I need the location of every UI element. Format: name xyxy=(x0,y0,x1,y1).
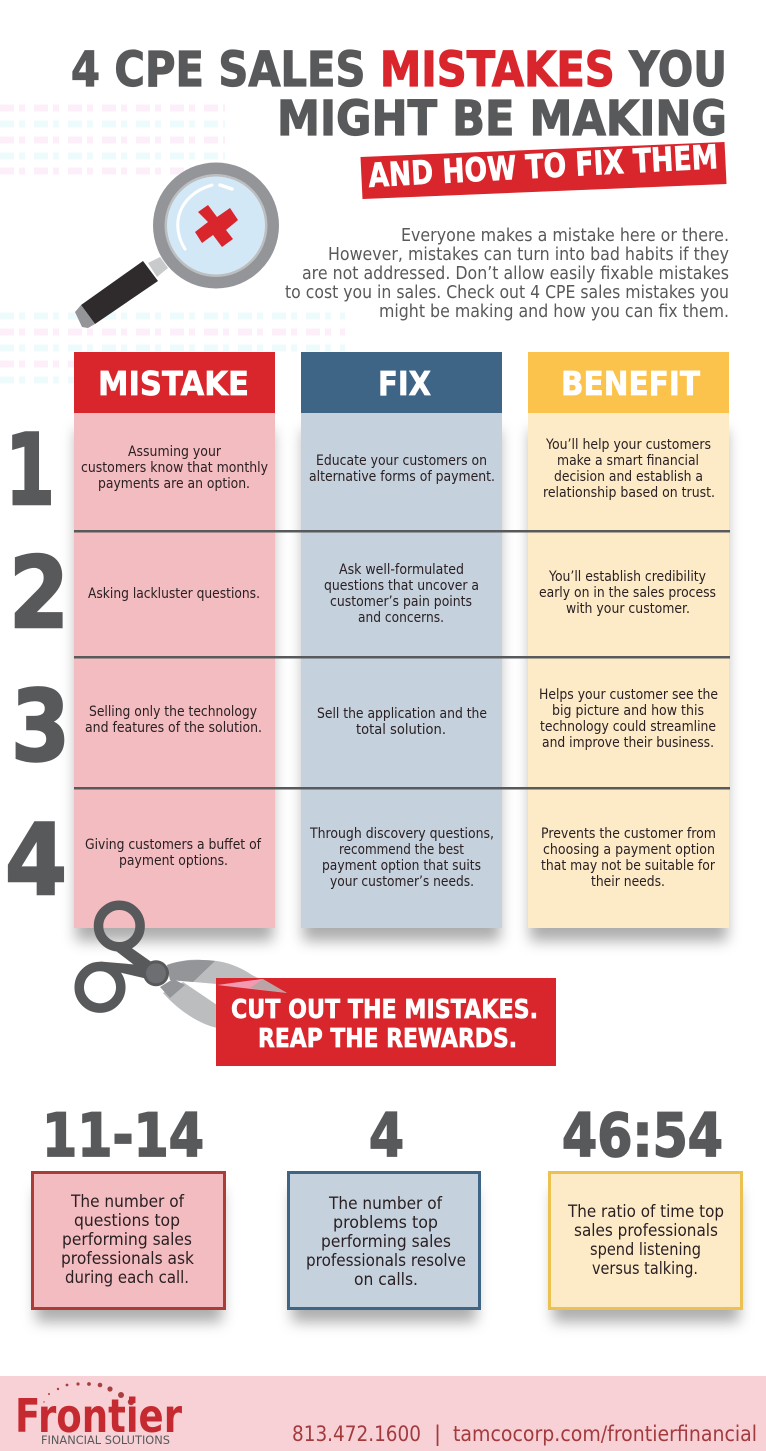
stat: 46:54: 46:54 xyxy=(562,1101,723,1171)
panel: mistake column xyxy=(74,352,275,928)
stat box 2: performing sales xyxy=(321,1232,451,1252)
fix 4: payment option that suits xyxy=(322,858,481,874)
stat box 2: professionals resolve xyxy=(306,1251,466,1271)
stat: 4 xyxy=(288,1101,480,1308)
stat box 2: problems top xyxy=(333,1213,438,1233)
stat box 3: sales professionals xyxy=(574,1221,718,1241)
fix 3 xyxy=(317,706,487,738)
benefit 2: with your customer. xyxy=(566,601,690,617)
stat box 1: during each call. xyxy=(65,1268,189,1288)
stat box 3: spend listening xyxy=(590,1240,701,1260)
fix 1 xyxy=(309,453,495,485)
fix 4: Through discovery questions, xyxy=(309,826,494,842)
icon: scissors xyxy=(79,905,287,1028)
fix 4 xyxy=(309,826,494,890)
title: 4 CPE SALES MISTAKES YOU xyxy=(71,42,727,98)
stat: 46:54 xyxy=(550,1101,742,1308)
benefit 2: You’ll establish credibility xyxy=(548,569,706,585)
benefit header xyxy=(528,352,729,413)
benefit 4 xyxy=(541,826,716,890)
logo: Frontier: FINANCIAL SOLUTIONS xyxy=(41,1433,170,1447)
stat box 3 xyxy=(550,1172,742,1308)
number 4: 4 xyxy=(5,804,67,918)
mistake 1: customers know that monthly xyxy=(81,460,268,476)
logo: Frontier: Frontier xyxy=(15,1389,182,1443)
benefit 4: that may not be suitable for xyxy=(541,858,715,874)
fix 1: Educate your customers on xyxy=(316,453,487,469)
stat box 3: The ratio of time top xyxy=(567,1202,724,1222)
intro text xyxy=(285,226,729,322)
fix 2: Ask well-formulated xyxy=(339,562,464,578)
stat box 2 xyxy=(288,1172,480,1308)
benefit 3: technology could streamline xyxy=(540,719,716,735)
mistake 4: Giving customers a buffet of xyxy=(85,837,262,853)
benefit 1: make a smart financial xyxy=(557,453,699,469)
contact line: | xyxy=(434,1422,441,1447)
benefit 1: decision and establish a xyxy=(554,469,703,485)
stat: 4: 4 xyxy=(369,1101,404,1171)
mistake header xyxy=(74,352,275,413)
stat box 2: The number of xyxy=(328,1194,443,1214)
benefit 1: You’ll help your customers xyxy=(545,437,711,453)
benefit 4: choosing a payment option xyxy=(543,842,715,858)
callout: CUT OUT THE MISTAKES. xyxy=(231,995,538,1025)
benefit 1: relationship based on trust. xyxy=(543,485,715,501)
contact line: 813.472.1600 xyxy=(292,1422,421,1446)
fix 2: customer’s pain points xyxy=(330,594,472,610)
mistake 1: Assuming your xyxy=(128,444,221,460)
stat: 11-14 xyxy=(32,1101,224,1308)
title xyxy=(71,42,727,147)
footer xyxy=(0,1376,766,1451)
callout: REAP THE REWARDS. xyxy=(258,1024,517,1054)
mistake 2: Asking lackluster questions. xyxy=(88,586,260,602)
fix 4: recommend the best xyxy=(339,842,464,858)
stat box 1: The number of xyxy=(70,1192,185,1212)
fix 4: your customer’s needs. xyxy=(330,874,474,890)
stat box 1: professionals ask xyxy=(61,1249,194,1269)
benefit 3: Helps your customer see the xyxy=(539,687,718,703)
mistake 4: payment options. xyxy=(119,853,228,869)
fix 2: questions that uncover a xyxy=(324,578,479,594)
mistake 1: payments are an option. xyxy=(98,476,250,492)
contact line xyxy=(292,1422,757,1447)
benefit 4: Prevents the customer from xyxy=(541,826,716,842)
fix 2: and concerns. xyxy=(358,610,444,626)
title: MIGHT BE MAKING xyxy=(277,91,727,147)
intro text: might be making and how you can fix them. xyxy=(379,302,729,322)
benefit 3: and improve their business. xyxy=(542,735,714,751)
benefit 3 xyxy=(539,687,718,751)
icon: magnifying glass xyxy=(75,162,279,328)
intro text: are not addressed. Don’t allow easily fixable mistakes xyxy=(302,264,729,284)
benefit 2 xyxy=(539,569,716,617)
intro text: to cost you in sales. Check out 4 CPE sales mistakes you xyxy=(285,283,729,303)
stat box 1: questions top xyxy=(74,1211,180,1231)
intro text: Everyone makes a mistake here or there. xyxy=(401,226,729,246)
mistake 3: and features of the solution. xyxy=(85,720,262,736)
intro text: However, mistakes can turn into bad habits if they xyxy=(328,245,729,265)
mistake 1 xyxy=(81,444,268,492)
mistake 4 xyxy=(85,837,262,869)
benefit 3: big picture and how this xyxy=(552,703,704,719)
stat box 2: on calls. xyxy=(354,1270,418,1290)
stat box 3: versus talking. xyxy=(592,1259,698,1279)
fix header: FIX xyxy=(378,364,431,403)
panel: fix column xyxy=(301,352,502,928)
benefit 4: their needs. xyxy=(591,874,665,890)
number 3: 3 xyxy=(11,670,70,784)
benefit 1 xyxy=(543,437,715,501)
mistake header: MISTAKE xyxy=(98,364,249,403)
benefit header: BENEFIT xyxy=(561,364,700,403)
icon: red x xyxy=(195,205,238,247)
panel: benefit column xyxy=(528,352,729,928)
benefit 2: early on in the sales process xyxy=(539,585,716,601)
fix header xyxy=(301,352,502,413)
stat box 1: performing sales xyxy=(62,1230,192,1250)
fix 3: total solution. xyxy=(356,722,446,738)
callout xyxy=(216,978,556,1066)
logo: Frontier xyxy=(15,1382,182,1447)
fix 1: alternative forms of payment. xyxy=(309,469,495,485)
number 1: 1 xyxy=(5,414,55,528)
fix 3: Sell the application and the xyxy=(317,706,487,722)
stat: 11-14: 11-14 xyxy=(42,1101,204,1171)
mistake 3: Selling only the technology xyxy=(89,704,257,720)
stat box 1 xyxy=(32,1172,224,1308)
mistake 3 xyxy=(85,704,262,736)
fix 2 xyxy=(324,562,479,626)
number 2: 2 xyxy=(9,537,69,651)
